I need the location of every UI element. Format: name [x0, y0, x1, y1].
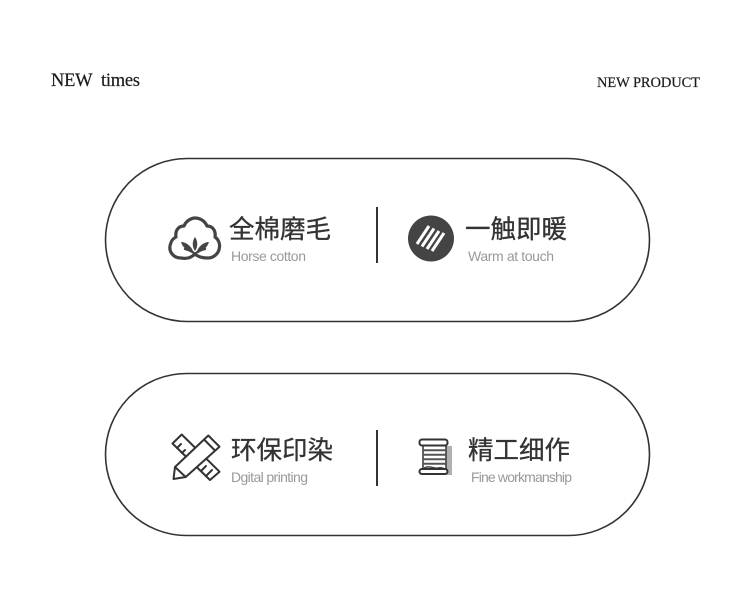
- heading: NEW times: NEW times: [51, 71, 140, 91]
- text: Digital printing: Dgital printing: [231, 469, 308, 485]
- divider: bottom panel: [376, 430, 378, 486]
- panel: top features: [106, 158, 650, 322]
- text: 全棉磨毛: 全棉磨毛: [229, 216, 331, 244]
- text: 一触即暖: 一触即暖: [465, 216, 567, 244]
- icon: thread spool: [420, 440, 452, 475]
- icon: cotton: [170, 218, 220, 258]
- text: 精工细作: 精工细作: [468, 437, 570, 465]
- text: 环保印染: 环保印染: [231, 437, 333, 465]
- text: Fine workmanship: Fine workmanship: [471, 469, 572, 485]
- text: Horse cotton: Horse cotton: [231, 248, 306, 264]
- text: Warm at touch: Warm at touch: [468, 248, 554, 264]
- heading: NEW PRODUCT: NEW PRODUCT: [597, 75, 700, 91]
- panel: bottom features: [106, 374, 650, 536]
- icon: warm touch: [408, 216, 454, 262]
- icon: pencil and ruler: [172, 434, 220, 480]
- divider: top panel: [376, 207, 378, 263]
